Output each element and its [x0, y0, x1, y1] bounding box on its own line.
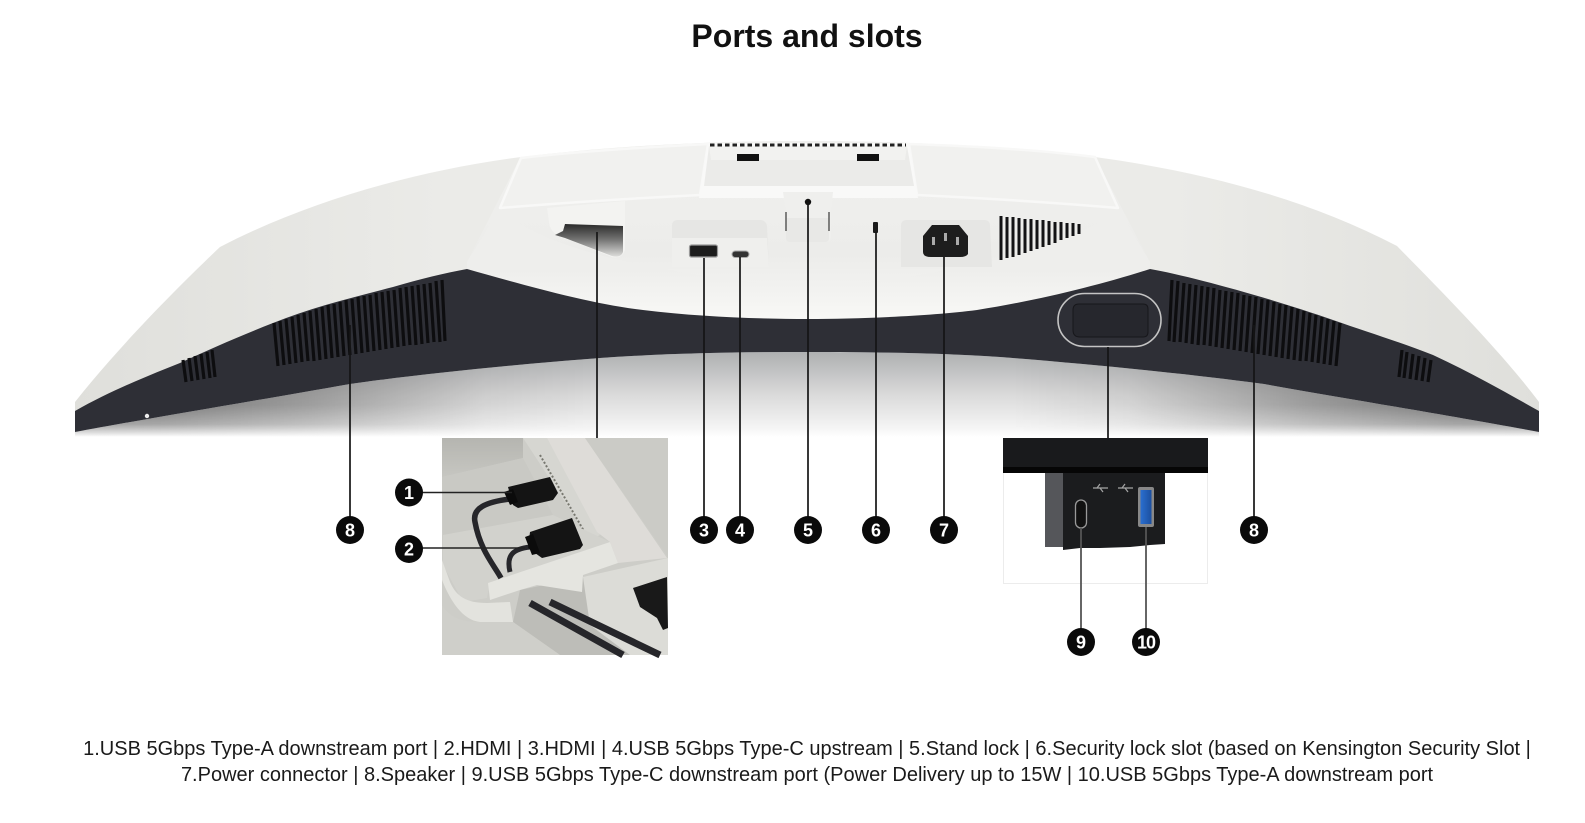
- caption: port legend: 7.Power connector | 8.Speaker | 9.USB 5Gbps Type-C downstream port (Power Delivery up to 15W | 10.USB 5Gbps Type-A downstream port: [181, 764, 1433, 786]
- caption: port legend: 1.USB 5Gbps Type-A downstream port | 2.HDMI | 3.HDMI | 4.USB 5Gbps Type-C upstream | 5.Stand lock | 6.Security lock slot (based on Kensington Security Slot |: [83, 738, 1531, 760]
- USB symbols: [1093, 484, 1133, 492]
- hub block front: [1063, 473, 1165, 550]
- marker 7: [930, 516, 958, 544]
- shadow under monitor: [75, 352, 1539, 437]
- leader lines: [409, 492, 525, 548]
- marker 9: 9: [1076, 632, 1086, 652]
- callout lines: [350, 202, 1254, 530]
- side wall: [523, 438, 600, 540]
- hook: [442, 560, 513, 622]
- dark lower edge: [75, 269, 1539, 432]
- textured panel: [585, 438, 668, 557]
- light rear shell: [75, 141, 1539, 414]
- bottom left surface: [442, 605, 560, 655]
- title: Ports and slots: [691, 18, 923, 54]
- marker 7: 7: [939, 520, 949, 540]
- lower lip highlight: [467, 209, 1150, 319]
- marker 5: [794, 516, 822, 544]
- marker 2: 2: [404, 540, 414, 560]
- cable 1: [475, 499, 510, 578]
- bundled cables: [530, 602, 660, 655]
- power connector panel: [901, 220, 992, 267]
- USB-A port: [1138, 487, 1154, 527]
- dark plug: [633, 577, 668, 630]
- leader lines: [1081, 527, 1146, 642]
- vent strip: [540, 455, 588, 538]
- cable slot: [547, 201, 625, 257]
- inset photo: side ports 9 and 10: [1003, 438, 1208, 642]
- back wall: [442, 438, 523, 477]
- marker 1: [395, 478, 423, 506]
- marker 8 right: 8: [1249, 520, 1259, 540]
- monitor rear body: [75, 141, 1539, 432]
- marker 4: [726, 516, 754, 544]
- speaker grille left large: [274, 280, 445, 366]
- vent slats center: [1001, 216, 1079, 260]
- floor: [442, 458, 553, 535]
- cable access capsule: [1058, 294, 1161, 346]
- marker 3: [690, 516, 718, 544]
- right housing: [583, 558, 668, 655]
- stand plate left: [500, 144, 708, 208]
- stand mount recess: [699, 143, 918, 198]
- security lock slot: [873, 222, 878, 233]
- connector 1: [508, 477, 558, 508]
- marker 8 left: 8: [345, 520, 355, 540]
- marker 6: [862, 516, 890, 544]
- power indicator: [145, 414, 149, 418]
- black bar: [1003, 438, 1208, 473]
- marker 4: 4: [735, 520, 745, 540]
- hub block side: [1045, 473, 1065, 547]
- diagram: monitor rear with port callouts: [75, 141, 1539, 658]
- connector collars: [504, 489, 540, 555]
- stand lock: [783, 192, 833, 242]
- speaker grille right small: [1399, 350, 1431, 382]
- cable 2: [509, 547, 530, 572]
- lower floor: [443, 515, 610, 602]
- marker 8 right: [1240, 516, 1268, 544]
- marker 6: 6: [871, 520, 881, 540]
- marker 1: 1: [404, 483, 414, 503]
- USB-C port: [1076, 500, 1086, 528]
- angled panel: [547, 438, 667, 563]
- white cable tray: [488, 542, 618, 600]
- connector 2: [528, 518, 583, 558]
- marker 8 left: [336, 516, 364, 544]
- stand plate right: [909, 144, 1118, 208]
- speaker grille left small: [183, 350, 215, 382]
- under tray shade: [513, 577, 668, 655]
- marker 10: [1132, 628, 1160, 656]
- marker 10: 10: [1137, 632, 1156, 652]
- marker 5: 5: [803, 520, 813, 540]
- inset photo: rear ports 1 and 2: [409, 438, 668, 655]
- center housing: [467, 141, 1150, 321]
- marker 3: 3: [699, 520, 709, 540]
- speaker grille right large: [1169, 280, 1340, 366]
- port panel: HDMI and USB-C: [672, 220, 769, 267]
- marker 9: [1067, 628, 1095, 656]
- marker 2: [395, 535, 423, 563]
- caption: port legend: [83, 738, 1531, 786]
